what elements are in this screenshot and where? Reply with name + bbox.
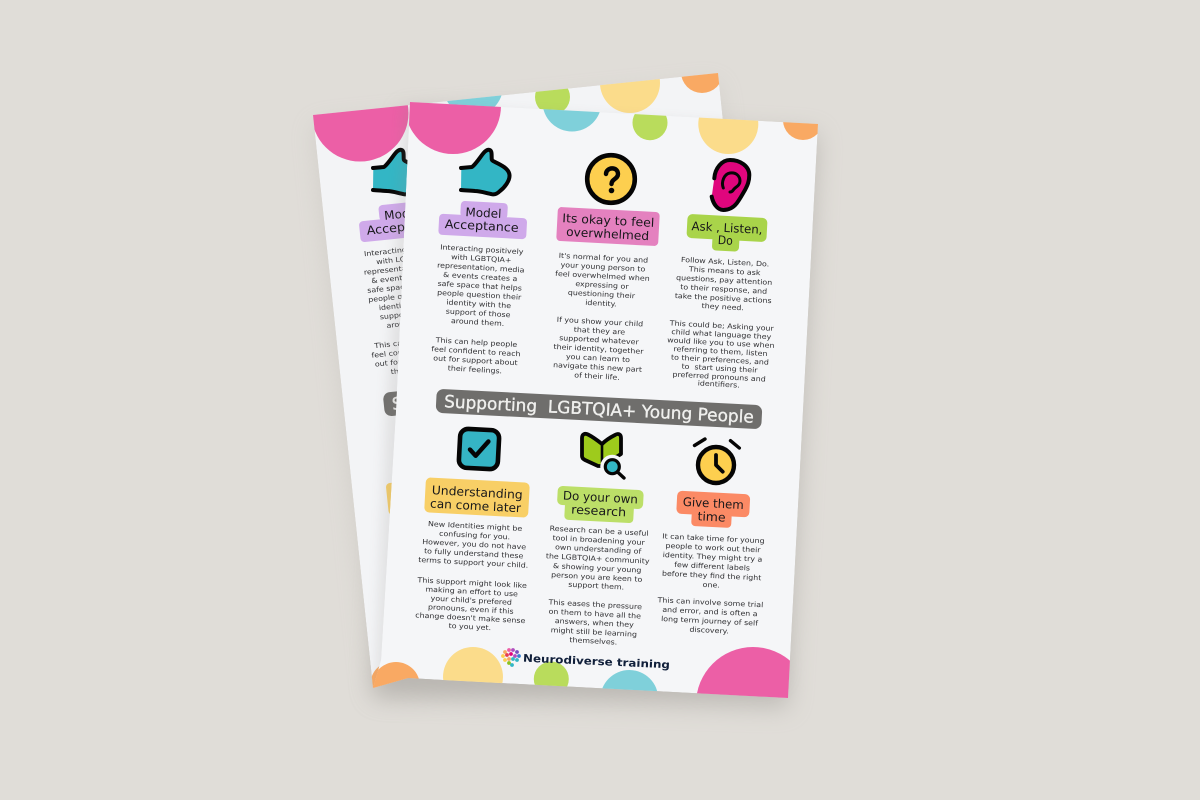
text: back sheet body: This can help people	[373, 333, 456, 350]
text: Ask Listen Do body: This could be; Asking your	[669, 319, 775, 333]
text: give them time body: This can involve some trial	[656, 596, 763, 609]
text: Model Acceptance body: their feelings.	[447, 364, 502, 375]
text: Model Acceptance body: & events creates a	[443, 270, 518, 283]
text: Ask Listen Do body: preferred pronouns and	[672, 370, 766, 383]
text: give them time body	[655, 532, 766, 637]
label sliver: Understanding (back)	[386, 482, 392, 514]
text: Ask Listen Do body: to their preferences, and	[671, 353, 769, 367]
label: Understanding can come later	[424, 477, 530, 518]
text: Understanding body: This support might look like	[416, 576, 527, 590]
text: back sheet body: identity with the	[378, 297, 444, 312]
text: back sheet body: with LGBTQIA+	[376, 252, 437, 266]
label: Model Acceptance: Acceptance	[444, 217, 519, 235]
text: back sheet body: & events creates a	[371, 269, 446, 285]
icon: ear	[712, 160, 749, 210]
text: give them time body: few different labels	[674, 560, 750, 572]
text: Understanding body: change doesn't make sense	[415, 611, 526, 625]
text: give them time body: before they find the right	[662, 569, 762, 582]
text: Understanding body: making an effort to use	[425, 585, 519, 598]
text: give them time body: long term journey of self	[661, 614, 759, 627]
text: research body: tool in broadening your	[552, 534, 646, 547]
text: research body: on them to have all the	[548, 607, 642, 620]
text: Model Acceptance body: safe space that helps	[437, 279, 522, 292]
title bar (back): Supporting LGBTQIA+ Young People	[391, 363, 701, 415]
text: Understanding body: to fully understand these	[424, 547, 524, 560]
logo: Neurodiverse training: Neurodiverse training	[523, 653, 670, 671]
text: overwhelmed body: of their life.	[574, 371, 620, 382]
label: Ask, Listen, Do	[686, 214, 768, 253]
text: Ask Listen Do body: identifiers.	[697, 379, 740, 390]
text: back sheet body: support of those	[379, 306, 445, 321]
text: Ask Listen Do body: would like you to use when	[667, 336, 775, 350]
icon: thumbs up	[461, 150, 510, 194]
label: Its okay to feel overwhelmed: Its okay to feel	[562, 211, 655, 230]
text: Understanding body: However, you do not have	[422, 537, 527, 551]
text: Ask Listen Do body	[668, 256, 774, 388]
text: Model Acceptance body: This can help people	[434, 336, 518, 349]
text: Understanding body: New Identities might be	[428, 519, 523, 533]
text: back sheet body: feel confident to reach	[371, 342, 461, 360]
text: Ask Listen Do body: questions, pay attention	[676, 273, 773, 287]
text: research body: support them.	[568, 580, 624, 591]
text: overwhelmed body: their identity, together	[553, 342, 645, 356]
text: overwhelmed body: your young person to	[560, 260, 646, 273]
text: research body: person you are keen to	[551, 570, 643, 584]
label: Ask, Listen, Do: Ask , Listen,	[691, 219, 763, 237]
label: Its okay to feel overwhelmed: overwhelmed	[566, 225, 649, 243]
text: overwhelmed body: feel overwhelmed when	[555, 269, 650, 283]
text: overwhelmed body: supported whatever	[559, 334, 640, 346]
text: Model Acceptance body: people question their	[437, 288, 523, 302]
label: Ask, Listen, Do: Do	[717, 233, 733, 248]
text: overwhelmed body: you can learn to	[566, 352, 631, 364]
text: Ask Listen Do body: referring to them, listen	[673, 345, 768, 358]
label: Model Acceptance (back)	[359, 202, 406, 242]
logo: Neurodiverse training	[501, 648, 670, 671]
text: Model Acceptance body	[430, 243, 527, 376]
scene: two tilted flyer sheets	[313, 73, 824, 715]
text: overwhelmed body: questioning their	[568, 288, 636, 300]
icon: check box	[459, 429, 499, 469]
text: research body: own understanding of	[555, 543, 642, 556]
text: Model Acceptance body: support of those	[446, 307, 511, 319]
label: Give them time: Give them	[682, 495, 744, 512]
text: Model Acceptance body: feel confident to reach	[431, 345, 521, 358]
back sheet decorative circles	[312, 51, 723, 706]
text: research body: & showing your young	[553, 561, 642, 575]
text: Ask Listen Do body: Follow Ask, Listen, Do.	[681, 255, 769, 268]
text: Understanding body: terms to support your child.	[418, 555, 528, 570]
text: research body: might still be learning	[550, 626, 637, 639]
front sheet decorative circles	[373, 102, 818, 698]
text: overwhelmed body: It's normal for you and	[558, 251, 649, 265]
icon: question mark	[587, 155, 635, 203]
text: Model Acceptance body: Interacting positively	[440, 243, 524, 256]
text: research body: themselves.	[569, 636, 618, 646]
label: Do your own research: research	[571, 503, 627, 519]
text: Ask Listen Do body: take the positive actions	[675, 291, 772, 305]
label: Understanding can come later: Understanding	[431, 483, 523, 502]
text: back sheet body: representation, media	[363, 259, 451, 277]
text: back sheet body: people question their	[368, 287, 454, 304]
text: research body: Research can be a useful	[549, 524, 649, 538]
text: give them time body: one.	[702, 580, 720, 590]
text: research body: answers, when they	[555, 616, 635, 629]
text: overwhelmed body: that they are	[574, 325, 626, 336]
text: Understanding body: your child's prefered	[430, 594, 512, 607]
text: overwhelmed body: identity.	[585, 298, 617, 308]
label: Model Acceptance (back): Model	[384, 205, 421, 223]
text: overwhelmed body	[550, 251, 651, 383]
text: back sheet body: out for support about	[374, 351, 459, 369]
text: back sheet body: their feelings.	[390, 362, 445, 376]
text: Model Acceptance body: with LGBTQIA+	[451, 253, 512, 264]
text: overwhelmed body: If you show your child	[557, 315, 644, 328]
panel: front sheet	[373, 102, 818, 698]
text: give them time body: It can take time for young	[662, 532, 765, 545]
text: back sheet body: Interacting positively	[364, 241, 448, 258]
label: Model Acceptance: Model	[465, 205, 502, 221]
text: Understanding body: confusing for you.	[439, 529, 510, 541]
icon: book with magnifier	[582, 434, 624, 479]
text: research body: the LGBTQIA+ community	[546, 552, 650, 566]
icon: alarm clock	[694, 439, 739, 483]
text: Model Acceptance body: representation, media	[437, 261, 525, 274]
label: Do your own research: Do your own	[563, 489, 638, 506]
text: overwhelmed body: expressing or	[575, 279, 630, 291]
text: Ask Listen Do body: This means to ask	[688, 265, 761, 277]
text: Model Acceptance body: identity with the	[446, 298, 512, 310]
text: back sheet body: around them.	[386, 316, 440, 330]
label: Do your own research	[556, 486, 644, 524]
text: Understanding body	[414, 519, 531, 634]
text: Ask Listen Do body: to their response, and	[680, 283, 768, 296]
text: back sheet body	[364, 248, 404, 374]
text: give them time body: and error, and is often a	[662, 605, 758, 618]
title bar (back)	[383, 391, 397, 416]
label: Its okay to feel overwhelmed	[556, 207, 660, 246]
label: Give them time	[676, 491, 750, 529]
label: Understanding can come later: can come later	[430, 497, 521, 515]
text: give them time body: identity. They might try a	[663, 550, 763, 564]
icon: thumbs up (back)	[371, 148, 408, 196]
text: back sheet body: safe space that helps	[367, 278, 452, 295]
text: Ask Listen Do body: child what language they	[671, 327, 772, 341]
title bar: Supporting LGBTQIA+ Young People	[444, 392, 754, 428]
text: Model Acceptance body: around them.	[451, 316, 505, 328]
text: research body	[541, 524, 652, 648]
text: Ask Listen Do body: to start using their	[681, 362, 759, 374]
label: Give them time: time	[697, 509, 726, 525]
text: Understanding body: pronouns, even if this	[428, 603, 514, 616]
text: research body: This eases the pressure	[547, 598, 643, 611]
text: give them time body: discovery.	[689, 625, 729, 635]
label: Model Acceptance	[438, 200, 528, 239]
icon: logo brain dots	[501, 648, 521, 667]
text: Model Acceptance body: out for support about	[433, 354, 518, 367]
panel: back sheet	[313, 73, 722, 688]
label: Model Acceptance (back): Acceptance	[366, 216, 441, 238]
text: overwhelmed body: navigate this new part	[553, 361, 642, 374]
text: give them time body: people to work out their	[665, 541, 762, 554]
text: Ask Listen Do body: they need.	[701, 301, 744, 312]
text: Understanding body: to you yet.	[448, 621, 491, 632]
